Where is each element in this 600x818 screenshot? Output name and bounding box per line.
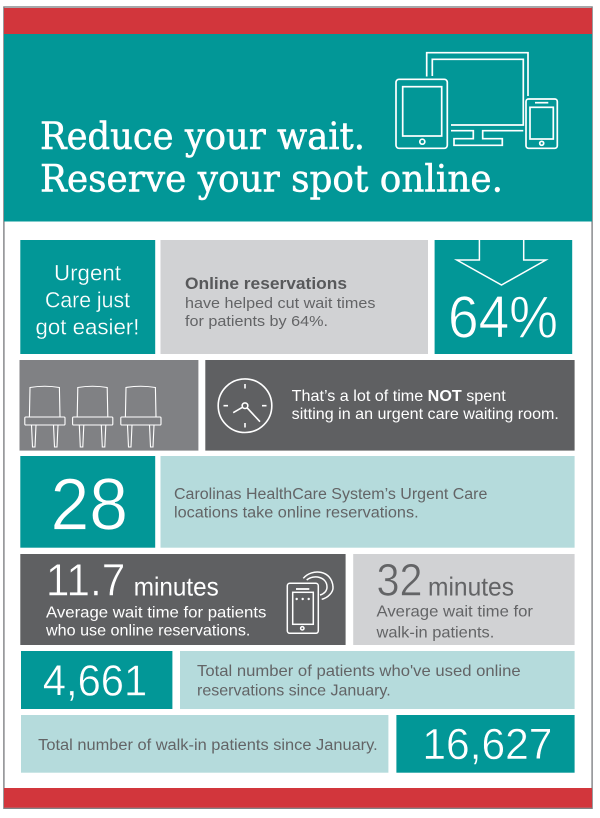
panel: 4,661 stat: 4,661 (43, 657, 147, 706)
top red band (4, 8, 592, 34)
panel: 32 minutes: Average wait time for (376, 604, 534, 621)
panel: 32 minutes (353, 554, 575, 645)
panel: online patients text: reservations since January. (197, 683, 391, 700)
panel: walk-in patients text: Total number of walk-in patients since January. (38, 737, 378, 754)
title: Reserve your spot online. (40, 158, 503, 200)
panel: urgent care: Urgent (54, 261, 121, 286)
bottom red band (4, 788, 592, 808)
panel: 64 percent: 64% (448, 285, 558, 351)
panel: walk-in patients text (21, 715, 388, 773)
panel: online reservations: have helped cut wait times (185, 295, 375, 312)
panel: 16,627 stat: 16,627 (422, 720, 552, 769)
panel: online reservations (160, 240, 428, 354)
panel: 32 minutes: walk-in patients. (375, 625, 494, 642)
panel: header (4, 34, 592, 222)
panel: 11.7 minutes (20, 554, 346, 645)
title (40, 115, 503, 200)
panel: 11.7 minutes: who use online reservations. (45, 623, 250, 640)
panel: 32 minutes: minutes (428, 572, 514, 602)
panel: time not spent: That’s a lot of time NOT spent (292, 388, 506, 405)
panel: 4,661 stat (21, 651, 172, 709)
panel: 64 percent (435, 240, 572, 354)
panel: online patients text (180, 651, 575, 709)
icon: devices (396, 53, 557, 148)
panel: locations text (160, 456, 575, 548)
icon: chair 2 (73, 386, 113, 447)
panel: 32 minutes: 32 (376, 555, 422, 606)
panel: online patients text: Total number of patients who've used online (197, 663, 521, 680)
panel: 11.7 minutes: 11.7 (46, 555, 125, 606)
panel: time not spent (205, 360, 575, 451)
panel: time not spent: sitting in an urgent care waiting room. (292, 406, 559, 423)
icon: down arrow (457, 240, 546, 285)
icon: chair 3 (121, 386, 161, 447)
panel: 28 stat: 28 (50, 464, 128, 545)
icon: chair 1 (25, 386, 65, 447)
panel: urgent care: Care just (45, 288, 130, 313)
panel: 11.7 minutes: Average wait time for patients (46, 605, 266, 622)
icon: clock (218, 379, 272, 433)
panel: locations text: locations take online reservations. (174, 505, 419, 522)
panel: urgent care (20, 240, 155, 354)
panel: chairs (20, 360, 198, 451)
panel: online reservations: for patients by 64%. (185, 313, 328, 330)
panel: urgent care: got easier! (36, 314, 140, 339)
icon: smartphone with signal (287, 572, 333, 633)
panel: locations text: Carolinas HealthCare System’s Urgent Care (174, 486, 487, 503)
panel: 11.7 minutes: minutes (134, 572, 219, 602)
title: Reduce your wait. (40, 115, 365, 158)
panel: 16,627 stat (396, 715, 575, 773)
panel: online reservations: Online reservations (185, 274, 347, 293)
panel: 28 stat (20, 456, 155, 548)
